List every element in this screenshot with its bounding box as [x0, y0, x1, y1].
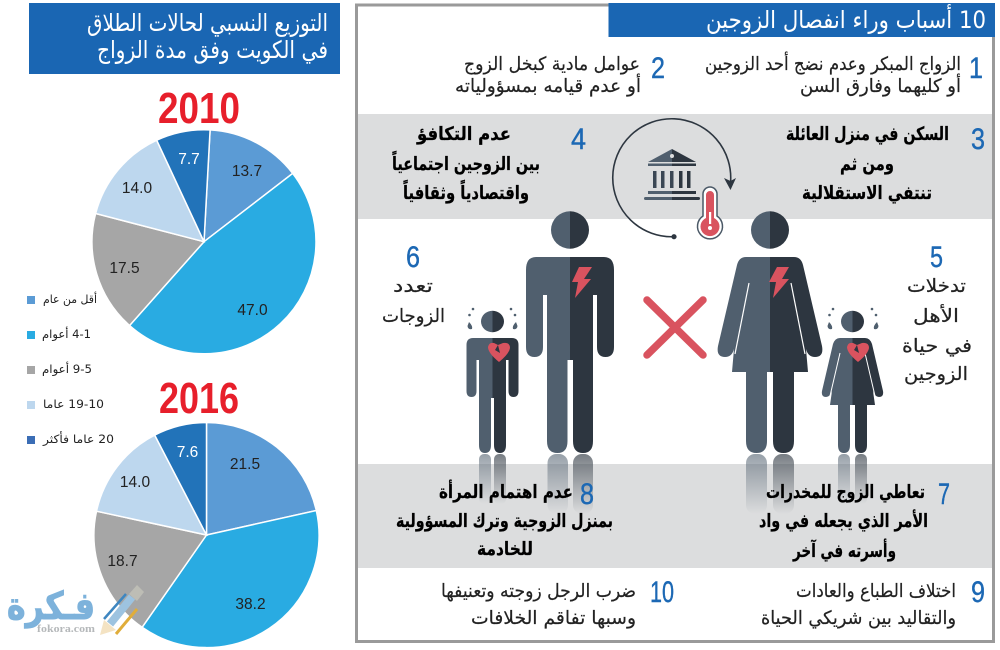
reason 3: السكن في منزل العائلة [786, 124, 949, 145]
pie chart 2016: 7.6 [177, 444, 198, 461]
reason 8 [396, 478, 613, 560]
reason 1: 1 [969, 52, 983, 85]
reason 7 [759, 478, 950, 562]
panel: ten reasons frame [356, 5, 994, 642]
pie chart 2010: 13.7 [232, 163, 262, 180]
reason 6: تعدد [393, 276, 433, 297]
legend: 9-5 أعوام [42, 361, 92, 377]
year 2010: 2010 [158, 84, 240, 133]
pie chart 2010: 7.7 [178, 151, 200, 168]
reason 10: 10 [650, 576, 674, 609]
heading: distribution title: التوزيع النسبي لحالات الطلاق [87, 9, 328, 37]
heading: distribution title: في الكويت وفق مدة الزواج [97, 36, 328, 64]
reason 3: ومن ثم [840, 154, 894, 175]
reason 2: عوامل مادية كبخل الزوج [464, 54, 640, 75]
reason 1: أو كليهما وفارق السن [800, 73, 961, 97]
legend: 20 عاما فأكثر [42, 431, 114, 447]
reason 5: تدخلات [907, 276, 966, 297]
icon: red cross [647, 300, 703, 355]
reason 7: 7 [938, 478, 950, 511]
pie chart 2016: 21.5 [230, 456, 260, 473]
reason 4: 4 [571, 123, 586, 156]
reason 5: في حياة [902, 336, 972, 357]
reason 2: أو عدم قيامه بمسؤولياته [455, 73, 641, 97]
pie chart 2016: 18.7 [107, 553, 138, 570]
reason 2: 2 [651, 52, 665, 85]
legend: 19-10 عاما [43, 397, 104, 411]
reason 6: 6 [406, 241, 420, 274]
reason 4: واقتصادياً وثقافياً [403, 179, 529, 204]
reason 8: للخادمة [477, 539, 533, 560]
reason 6 [382, 241, 445, 327]
reason 8: بمنزل الزوجية وترك المسؤولية [396, 511, 613, 532]
legend: 4-1 أعوام [42, 326, 91, 342]
icon: institution building [644, 149, 700, 200]
panel: divorce distribution [27, 3, 340, 648]
figure: girl with broken heart [822, 308, 883, 453]
reason 1 [705, 51, 983, 97]
watermark: fikra logo: fokora.com [37, 623, 95, 635]
reason 3: 3 [971, 123, 985, 156]
icon: circular arrow [613, 119, 736, 239]
reason 4: بين الزوجين اجتماعياً [392, 150, 540, 175]
figure: woman with lightning bolt [718, 211, 822, 453]
pie chart 2010: 17.5 [109, 260, 140, 277]
pie chart 2016: 38.2 [235, 596, 266, 613]
figure: boy with broken heart [466, 308, 518, 453]
pie chart 2016: 14.0 [120, 474, 150, 491]
reason 7: تعاطي الزوج للمخدرات [766, 482, 925, 503]
heading: ten reasons title: 10 أسباب وراء انفصال الزوجين [706, 4, 986, 34]
reason 9 [761, 576, 985, 629]
reason 7: وأسرته في آخر [792, 539, 896, 562]
reason 5: الزوجين [904, 364, 968, 385]
watermark: fikra logo: فـكرة [7, 584, 95, 628]
year 2016: 2016 [159, 374, 239, 423]
reason 8: 8 [580, 478, 594, 511]
watermark: fikra logo [7, 584, 144, 635]
icon: thermometer [698, 187, 722, 239]
reason 10: وسبها تفاقم الخلافات [471, 608, 636, 629]
pie chart 2010: 47.0 [237, 302, 268, 319]
reason 10 [441, 576, 674, 629]
reason 6: الزوجات [382, 306, 445, 327]
reason 5: الأهل [913, 304, 959, 327]
reason 3: تنتفي الاستقلالية [802, 183, 932, 204]
pie chart 2010: 14.0 [122, 180, 152, 197]
figure: man with lightning bolt [526, 211, 614, 453]
reason 5 [902, 241, 972, 385]
reason 9: اختلاف الطباع والعادات [796, 581, 956, 602]
pie chart 2010 [92, 130, 316, 354]
reason 1: الزواج المبكر وعدم نضج أحد الزوجين [705, 51, 961, 75]
reason 9: 9 [971, 576, 985, 609]
legend [27, 291, 114, 447]
reason 2 [455, 52, 665, 97]
reason 9: والتقاليد بين شريكي الحياة [761, 608, 956, 629]
reason 4: عدم التكافؤ [416, 124, 511, 145]
reason 5: 5 [930, 241, 943, 274]
reason 3 [786, 123, 985, 204]
heading: distribution title [29, 3, 340, 74]
reason 7: الأمر الذي يجعله في واد [759, 509, 928, 533]
heading: ten reasons title [608, 3, 995, 37]
reflections of family figures [479, 454, 867, 514]
legend: أقل من عام [43, 291, 97, 307]
reason 8: عدم اهتمام المرأة [439, 480, 573, 503]
pie chart 2016 [94, 422, 319, 648]
reason 10: ضرب الرجل زوجته وتعنيفها [441, 581, 636, 602]
reason 4 [392, 123, 586, 204]
